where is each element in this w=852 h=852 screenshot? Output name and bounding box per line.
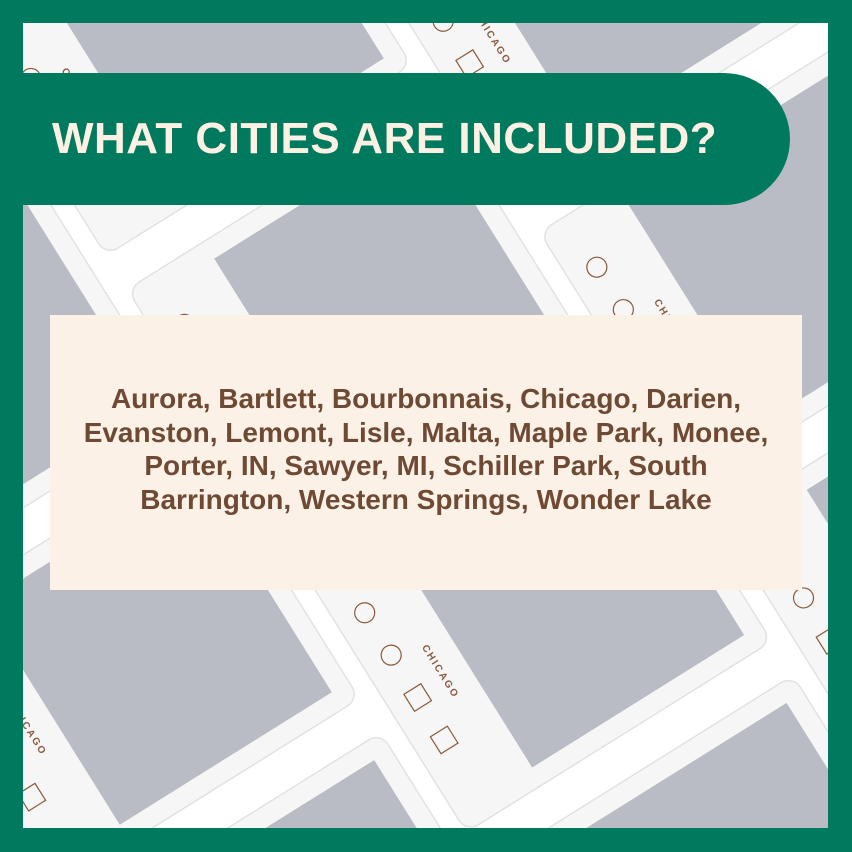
panel: city list: Barrington, Western Springs, Wonder Lake bbox=[140, 484, 712, 514]
title banner: WHAT CITIES ARE INCLUDED? bbox=[52, 114, 717, 163]
panel: city list: Porter, IN, Sawyer, MI, Schiller Park, South bbox=[144, 450, 708, 481]
panel: city list: Aurora, Bartlett, Bourbonnais, Chicago, Darien, bbox=[111, 383, 741, 414]
panel: city list bbox=[50, 315, 802, 590]
title banner bbox=[23, 73, 790, 205]
panel: city list: Evanston, Lemont, Lisle, Malta, Maple Park, Monee, bbox=[84, 416, 768, 448]
